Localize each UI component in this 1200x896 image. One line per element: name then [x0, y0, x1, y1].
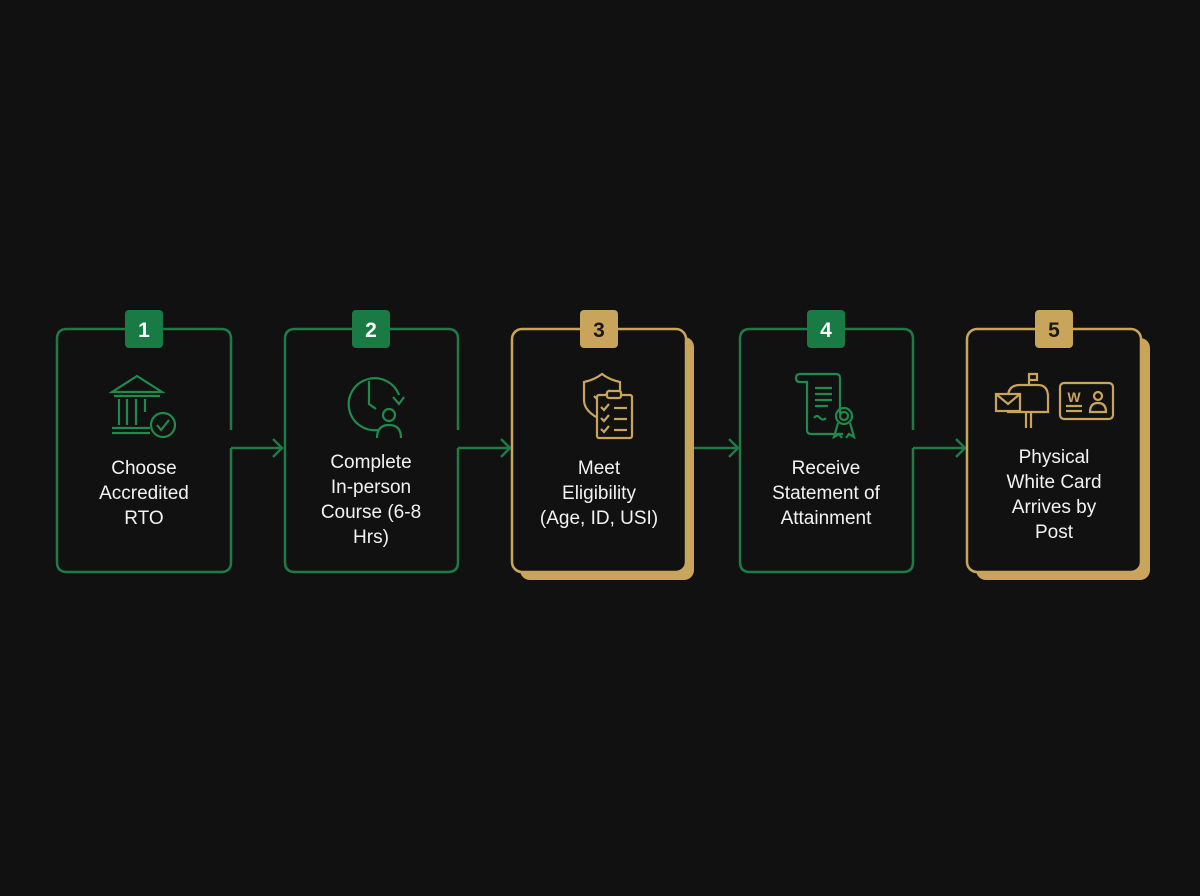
- label 5: Physical: [1019, 447, 1089, 468]
- arrow 4 to 5: [913, 439, 965, 457]
- arrow 2 to 3: [458, 439, 510, 457]
- icon: certificate scroll: [796, 374, 854, 438]
- badge 3: [580, 310, 618, 348]
- badge 4: [807, 310, 845, 348]
- card 2: Complete In-person Course: [285, 310, 458, 572]
- card 4: Receive Statement of Attainment: [740, 310, 913, 572]
- label 5: Arrives by: [1012, 497, 1097, 518]
- badge 1: [125, 310, 163, 348]
- label 5: Post: [1035, 522, 1074, 543]
- icon: bank with check: [112, 376, 175, 437]
- badge 1: 1: [138, 319, 150, 342]
- label 3: (Age, ID, USI): [540, 508, 658, 529]
- arrow 3 to 4: [694, 439, 738, 457]
- arrow 1 to 2: [231, 439, 282, 457]
- label 1: Accredited: [99, 483, 189, 504]
- label 2: Complete: [330, 452, 412, 473]
- badge 2: 2: [365, 319, 377, 342]
- label 3: Meet: [578, 458, 621, 479]
- icon: shield and checklist: [584, 374, 632, 438]
- label 1: Choose: [111, 458, 177, 479]
- icon: clock with person: [349, 378, 404, 438]
- icon: mailbox and ID card: [996, 374, 1113, 428]
- label 2: Course (6-8: [321, 502, 421, 523]
- label 5: White Card: [1006, 472, 1102, 493]
- card 5: Physical White Card Arrives by Post: [967, 310, 1150, 580]
- label 4: Statement of: [772, 483, 881, 504]
- badge 5: 5: [1048, 319, 1060, 342]
- badge 4: 4: [820, 319, 832, 342]
- card 3: Meet Eligibility: [512, 310, 694, 580]
- badge 3: 3: [593, 319, 605, 342]
- card 1: Choose Accredited RTO: [57, 310, 231, 572]
- label 3: Eligibility: [562, 483, 636, 504]
- badge 2: [352, 310, 390, 348]
- icon: mailbox and ID card: W: [1067, 389, 1081, 405]
- label 4: Attainment: [781, 508, 872, 529]
- label 2: Hrs): [353, 527, 389, 548]
- label 1: RTO: [124, 508, 164, 529]
- badge 5: [1035, 310, 1073, 348]
- label 4: Receive: [792, 458, 860, 479]
- label 2: In-person: [331, 477, 411, 498]
